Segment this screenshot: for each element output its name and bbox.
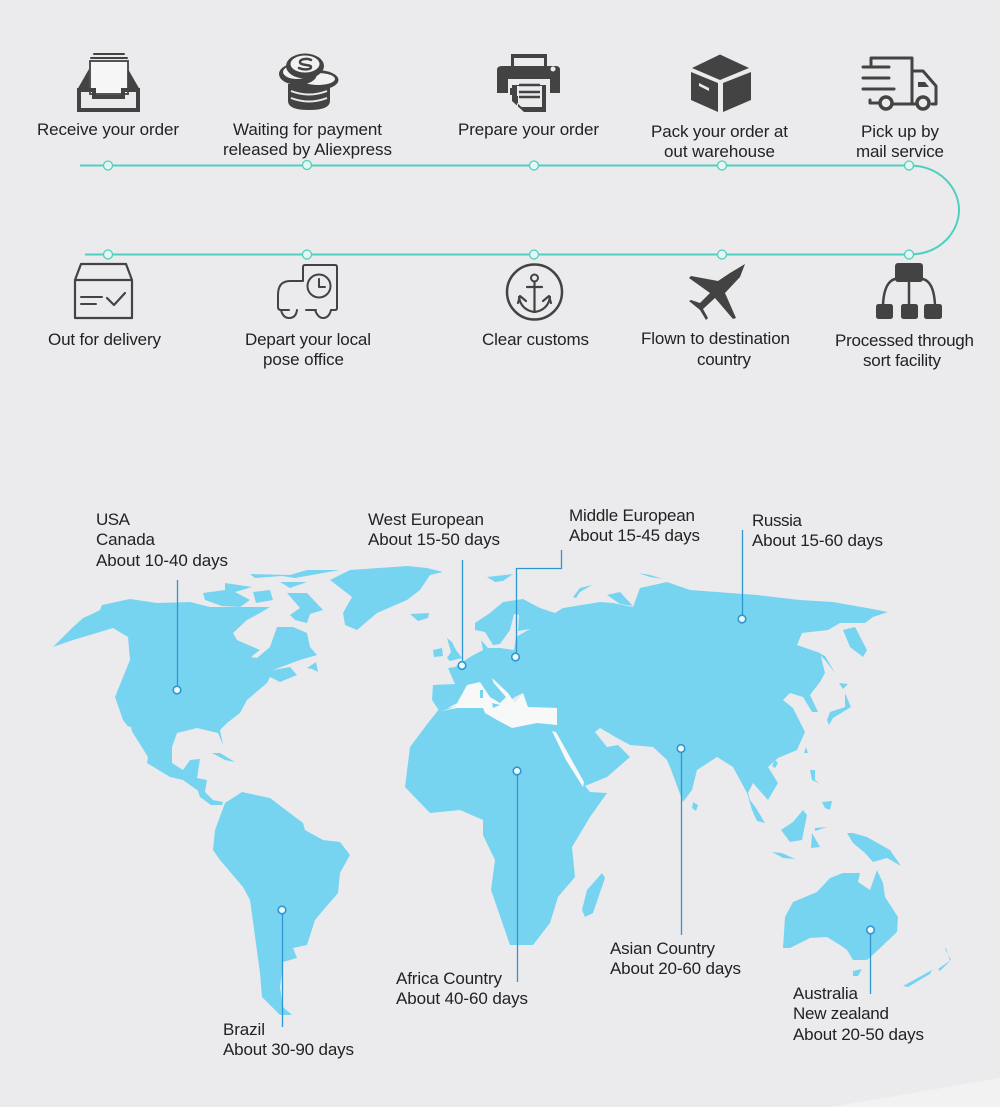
map: Japan, Sakhalin and Kamchatka [817,627,867,725]
step: Pack your order: out warehouse [664,142,775,161]
leader line [516,550,562,657]
icon: anchor in circle [507,264,562,320]
icon: inbox tray [77,54,140,112]
callout: Asian Country: About 20-60 days [610,959,741,978]
label: Australia [793,984,859,1003]
label: Pick up by [861,122,940,141]
step: Pick up by mail service [856,58,944,161]
timeline track [80,166,959,254]
callout: Brazil: About 30-90 days [223,1040,354,1059]
callout: USA and Canada: About 10-40 days [96,551,228,570]
callout: Australia and New Zealand: New zealand [793,1004,889,1023]
panel: order process timeline [37,54,974,370]
map: British Isles and Svalbard [433,573,663,661]
callout: USA and Canada: Canada [96,530,156,549]
callout: West European: About 15-50 days [368,530,500,549]
step: Waiting for payment: released by Aliexpress [223,140,392,159]
callout: Australia and New Zealand [793,926,924,1044]
map: New Guinea [847,833,901,866]
icon: coin stack [279,54,338,110]
label: Receive your order [37,120,179,139]
label: West European [368,510,484,529]
label: Out for delivery [48,330,162,349]
map: Arctic islands [203,570,340,623]
step: Processed through sort facility: sort facility [863,351,942,370]
icon: package box [691,54,751,112]
leader line [742,530,744,619]
map: Greenland [330,566,443,630]
label: Asian Country [610,939,716,958]
timeline nodes [104,160,914,259]
step: Receive your order [37,54,179,139]
map: Gulf of California [127,726,136,753]
leader line [282,910,284,1027]
icon: van with clock [278,265,337,318]
label: Processed through [835,331,974,350]
map: Southeast Asian islands [692,747,832,859]
label: Prepare your order [458,120,599,139]
panel: world map of delivery times [53,506,951,1059]
label: Waiting for payment [233,120,382,139]
label: Brazil [223,1020,265,1039]
leader line [870,930,872,994]
map: Australia [783,870,898,960]
map: North America [53,599,317,792]
label: Pack your order at [651,122,788,141]
step: Depart local post office: pose office [263,350,344,369]
step: Out for delivery [48,264,162,349]
step: Pick up by mail service: mail service [856,142,944,161]
icon: printer [497,54,560,112]
callout: West European [368,510,500,669]
icon: parcel with check [75,264,132,318]
map: Africa [405,706,607,945]
map: Cuba and Newfoundland [212,662,318,762]
step: Waiting for payment [223,54,392,159]
step: Processed through sort facility [835,263,974,370]
icon: airplane [689,264,745,320]
callout: Middle European [512,506,700,661]
callout: Russia: About 15-60 days [752,531,883,550]
step: Flown to destination country [641,264,790,369]
callout: Africa Country [396,767,528,1008]
label: Africa Country [396,969,502,988]
map: Mediterranean Sea [441,678,557,728]
leader line [516,771,518,982]
label: Middle European [569,506,695,525]
leader line [462,560,464,665]
step: Depart local post office [245,265,371,369]
map: Tasmania and New Zealand [853,948,951,987]
label: Russia [752,511,803,530]
map: Italy and islands [480,680,506,708]
step: Flown to destination country: country [697,350,752,369]
callout: Asian Country [610,745,741,978]
label: Depart your local [245,330,371,349]
map: Eurasia [432,582,888,823]
icon: sort hierarchy [876,263,942,319]
map: South America [213,792,350,1015]
world map [53,566,951,1015]
callout: Middle European: About 15-45 days [569,526,700,545]
callout: Australia and New Zealand: About 20-50 days [793,1025,924,1044]
label: Flown to destination [641,329,790,348]
map: Madagascar [582,873,605,917]
label: Clear customs [482,330,589,349]
label: USA [96,510,131,529]
leader line [680,748,682,935]
step: Pack your order [651,54,788,161]
icon: delivery truck [863,58,936,109]
callout: Brazil [223,906,354,1059]
step: Clear customs [482,264,589,349]
map: Central America [197,788,223,805]
callout: USA and Canada [96,510,228,694]
map: Iceland [410,613,429,621]
leader line [176,580,178,690]
callout: Russia [738,511,883,623]
callout: Africa Country: About 40-60 days [396,989,528,1008]
step: Prepare your order [458,54,599,139]
map: Red Sea [552,731,584,787]
